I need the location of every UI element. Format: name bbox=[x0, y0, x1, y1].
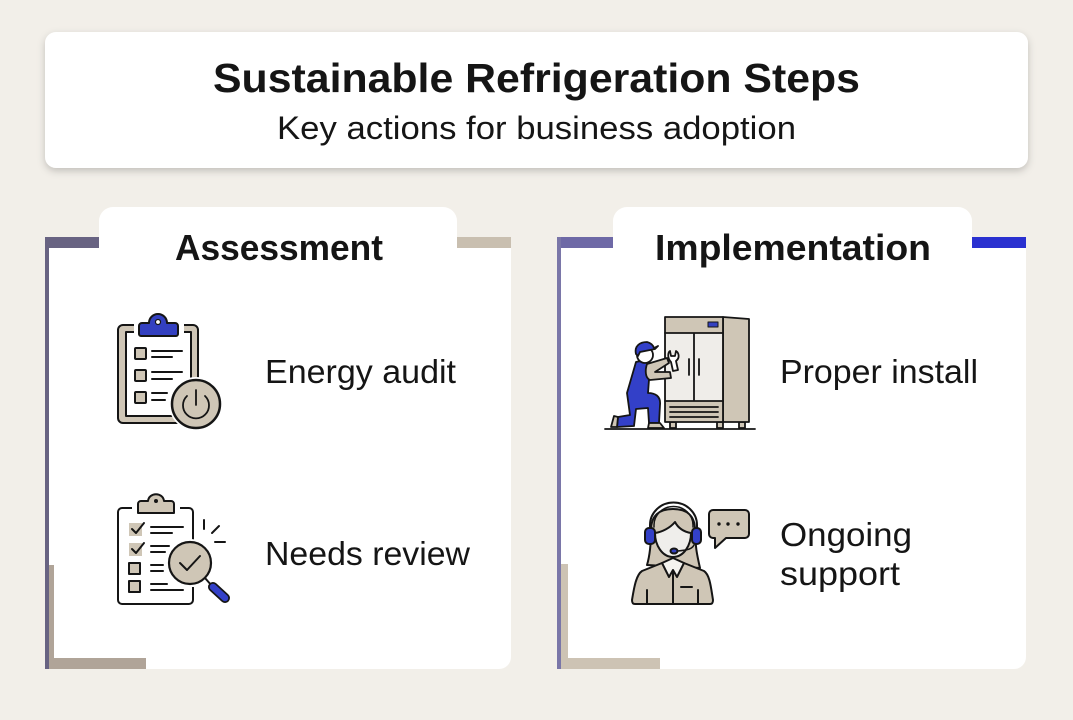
label: ongoing support bbox=[780, 516, 912, 592]
header card bbox=[45, 32, 1028, 168]
icon: worker installing refrigerator bbox=[605, 317, 755, 429]
panel: implementation bbox=[557, 207, 1026, 669]
icon: checklist with magnifier bbox=[118, 494, 225, 604]
panel: assessment bbox=[45, 207, 511, 669]
label: proper install: Proper install bbox=[780, 353, 978, 390]
label: needs review: Needs review bbox=[265, 535, 470, 572]
icon: support agent with headset bbox=[632, 503, 749, 604]
heading: assessment: Assessment bbox=[175, 227, 383, 268]
title: Sustainable Refrigeration Steps bbox=[213, 55, 860, 101]
label: ongoing support: Ongoing bbox=[780, 516, 912, 553]
heading: implementation: Implementation bbox=[655, 227, 931, 268]
icon: clipboard with power button bbox=[118, 314, 223, 431]
subtitle: Key actions for business adoption bbox=[277, 110, 796, 146]
label: ongoing support: support bbox=[780, 555, 900, 592]
label: energy audit: Energy audit bbox=[265, 353, 456, 390]
